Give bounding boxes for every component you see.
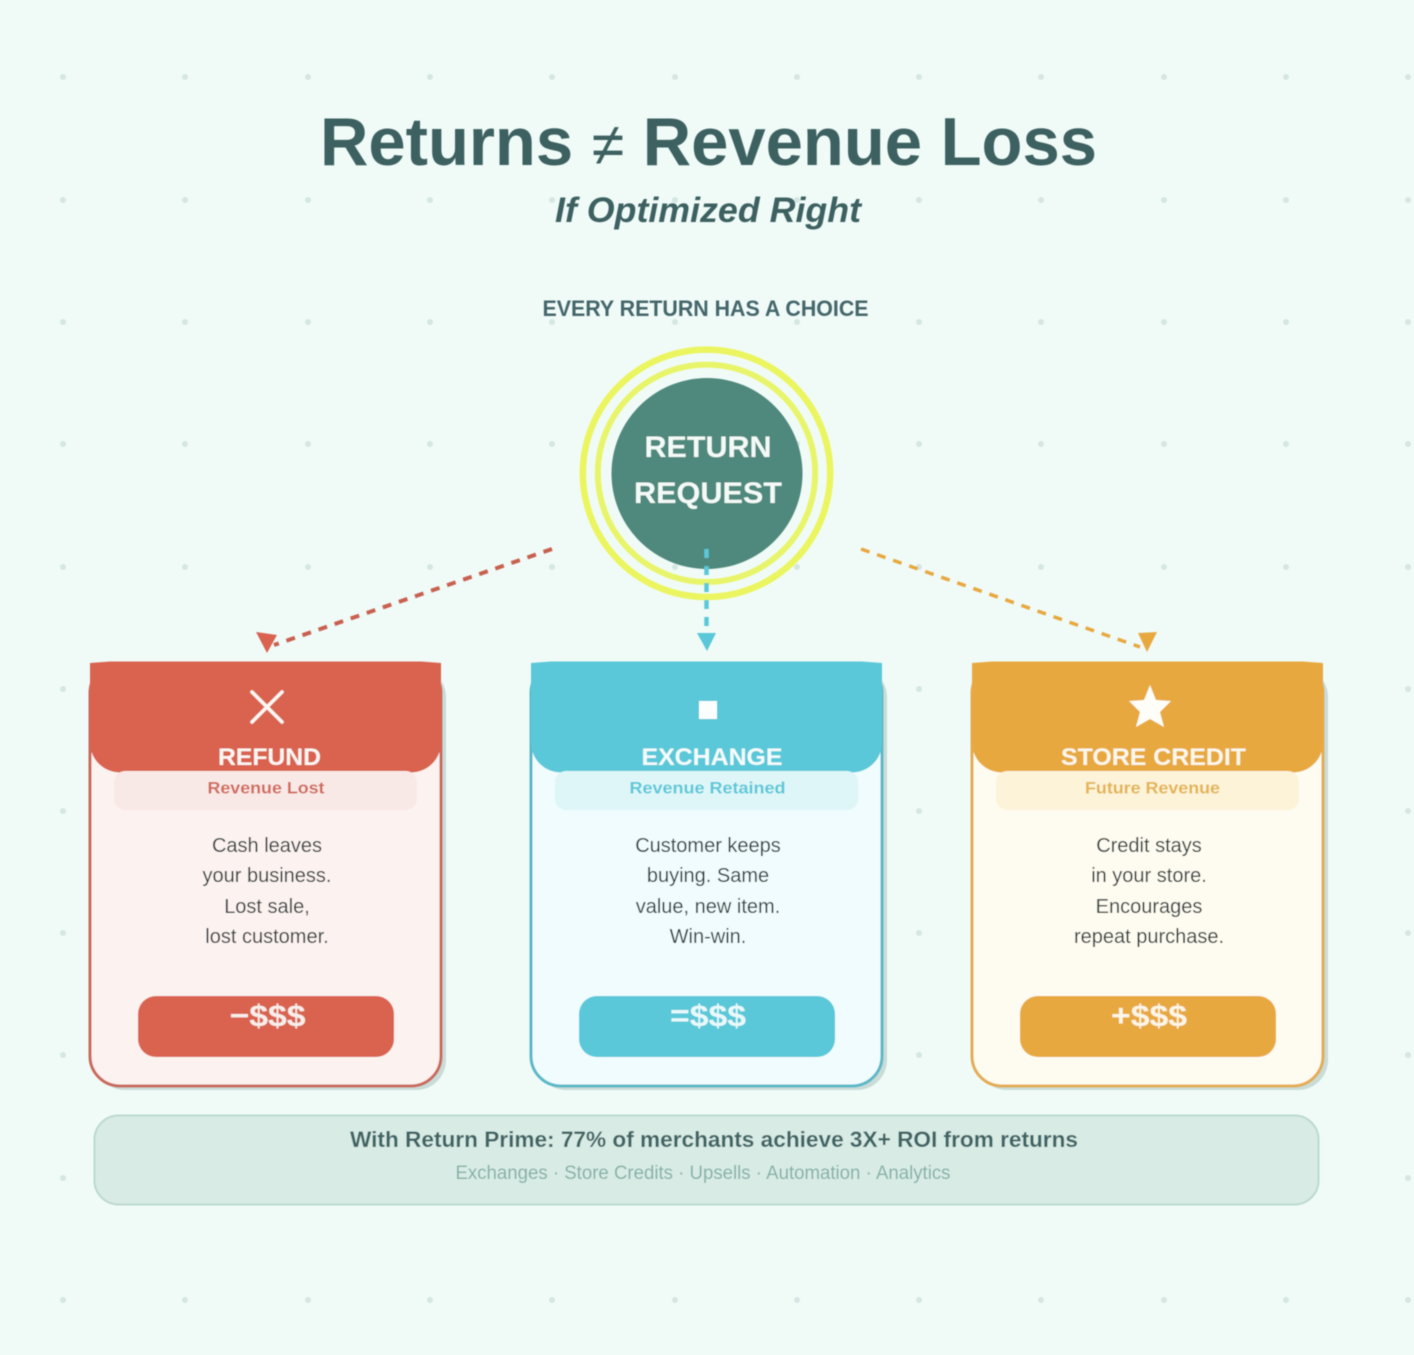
refund tag: Revenue Lost: [208, 778, 325, 798]
refund value: −$$$: [230, 998, 306, 1033]
refund description: your business.: [203, 865, 331, 887]
refund name: REFUND: [218, 744, 321, 771]
refund header: [90, 662, 441, 772]
store credit tag: [996, 771, 1299, 810]
exchange name: EXCHANGE: [642, 744, 782, 771]
title: Returns ≠ Revenue Loss: [320, 104, 1097, 180]
exchange value: [579, 996, 835, 1057]
return request node: [583, 350, 830, 597]
footer headline: With Return Prime: 77% of merchants achieve 3X+ ROI from returns: [350, 1127, 1078, 1152]
refund description: Cash leaves: [212, 835, 322, 857]
refund tag: [114, 771, 417, 810]
icon: cross: [252, 692, 282, 722]
arrow: to exchange: [697, 549, 716, 651]
exchange value: =$$$: [670, 998, 746, 1033]
arrow: to store credit: [861, 549, 1157, 652]
return request node: REQUEST: [634, 477, 782, 510]
exchange header: [531, 662, 882, 772]
store credit name: STORE CREDIT: [1061, 744, 1246, 771]
store credit header: [972, 662, 1323, 773]
exchange description: Customer keeps: [635, 835, 781, 857]
store credit value: [1020, 996, 1276, 1057]
refund description: lost customer.: [205, 926, 329, 948]
store credit description: Credit stays: [1096, 835, 1202, 857]
refund description: [203, 835, 331, 948]
exchange description: Win-win.: [670, 926, 746, 948]
exchange description: buying. Same: [647, 865, 769, 887]
exchange tag: Revenue Retained: [630, 778, 786, 798]
panel: exchange: [531, 662, 887, 1090]
return request node: RETURN: [644, 431, 772, 464]
panel: refund: [90, 662, 446, 1090]
panel: store credit: [972, 662, 1328, 1090]
store credit description: Encourages: [1096, 896, 1202, 918]
subtitle: If Optimized Right: [555, 191, 862, 230]
exchange tag: [555, 771, 858, 810]
footer banner: [94, 1116, 1318, 1204]
store credit value: +$$$: [1111, 998, 1187, 1033]
icon: square: [699, 701, 717, 719]
icon: star: [1129, 685, 1171, 727]
section label: EVERY RETURN HAS A CHOICE: [542, 296, 868, 321]
store credit description: repeat purchase.: [1074, 926, 1224, 948]
arrow: to refund: [256, 549, 552, 653]
exchange description: [635, 835, 781, 948]
store credit description: [1074, 835, 1224, 948]
refund description: Lost sale,: [224, 896, 310, 918]
store credit tag: Future Revenue: [1085, 778, 1220, 798]
footer features: Exchanges · Store Credits · Upsells · Automation · Analytics: [456, 1163, 950, 1184]
exchange description: value, new item.: [636, 896, 780, 918]
refund value: [138, 996, 394, 1057]
store credit description: in your store.: [1091, 865, 1207, 887]
